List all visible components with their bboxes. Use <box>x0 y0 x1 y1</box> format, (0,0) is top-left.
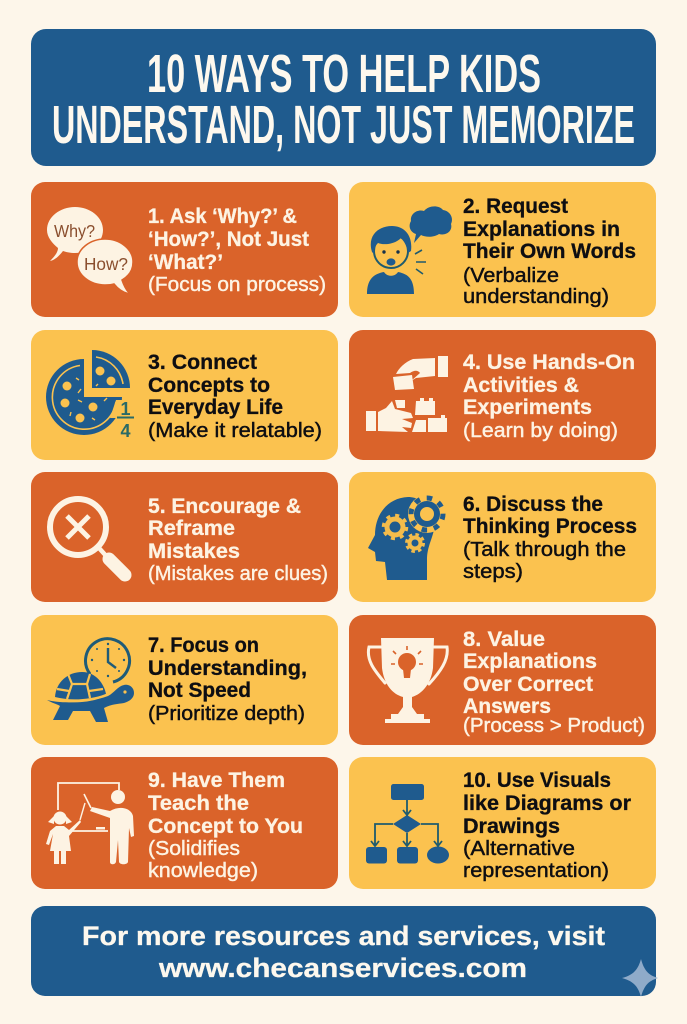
subtitle <box>463 837 609 882</box>
heading <box>148 768 303 838</box>
subtitle: representation) <box>463 859 609 882</box>
heading: 8. Value <box>463 627 545 651</box>
heading <box>463 627 597 718</box>
panel: tip 4 <box>349 330 656 460</box>
subtitle: (Make it relatable) <box>148 419 322 442</box>
subtitle: (Learn by doing) <box>463 419 618 442</box>
icon: child speaking <box>367 206 452 294</box>
heading: Reframe <box>148 516 235 540</box>
heading <box>148 350 283 419</box>
heading <box>148 494 301 563</box>
panel: tip 9 <box>31 757 338 889</box>
subtitle: steps) <box>463 560 523 583</box>
subtitle: (Talk through the <box>463 538 626 561</box>
heading: 2. Request <box>463 194 568 218</box>
footer text: For more resources and services, visit <box>82 921 605 951</box>
heading: 9. Have Them <box>148 768 285 792</box>
heading: Explanations in <box>463 217 620 241</box>
icon: pizza fraction: 4 <box>120 421 131 441</box>
panel: tip 10 <box>349 757 656 889</box>
icon: head with gears <box>368 495 446 580</box>
footer text: www.checanservices.com <box>158 953 527 983</box>
icon: turtle and clock <box>47 639 134 722</box>
heading: like Diagrams or <box>463 791 632 815</box>
subtitle: understanding) <box>463 285 609 308</box>
heading: Thinking Process <box>463 514 637 538</box>
panel: tip 8 <box>349 615 656 745</box>
title banner <box>31 29 656 166</box>
heading: Concept to You <box>148 814 303 838</box>
icon: speech bubbles: Why? <box>54 221 95 241</box>
subtitle <box>463 538 626 583</box>
heading: Everyday Life <box>148 395 283 419</box>
heading <box>463 492 637 538</box>
heading <box>148 204 309 274</box>
heading: 3. Connect <box>148 350 257 374</box>
subtitle: (Mistakes are clues) <box>148 562 328 585</box>
heading <box>463 194 636 263</box>
heading: Their Own Words <box>463 239 636 263</box>
heading: 7. Focus on <box>148 633 259 657</box>
panel: tip 5 <box>31 472 338 602</box>
subtitle: (Prioritize depth) <box>148 702 305 725</box>
subtitle: (Alternative <box>463 837 575 860</box>
title <box>52 44 635 155</box>
heading: 4. Use Hands-On <box>463 350 635 374</box>
icon: trophy with light bulb <box>368 638 447 723</box>
panel: tip 2 <box>349 182 656 317</box>
panel: tip 6 <box>349 472 656 602</box>
heading: Explanations <box>463 649 597 673</box>
heading: 10. Use Visuals <box>463 768 611 792</box>
panel: tip 3 <box>31 330 338 460</box>
heading <box>463 350 635 419</box>
subtitle: (Solidifies <box>148 837 240 860</box>
subtitle <box>463 264 609 308</box>
icon: flowchart <box>366 784 449 864</box>
heading: Drawings <box>463 814 560 838</box>
icon: hands and blocks <box>366 356 448 432</box>
heading: ‘What?’ <box>148 250 223 274</box>
heading: 5. Encourage & <box>148 494 301 518</box>
heading: Concepts to <box>148 373 270 397</box>
heading <box>148 633 307 702</box>
heading: Mistakes <box>148 539 240 563</box>
icon: magnifier with X <box>50 499 125 575</box>
footer text <box>82 921 605 983</box>
heading: Experiments <box>463 395 592 419</box>
heading: 1. Ask ‘Why?’ & <box>148 204 297 228</box>
heading: Activities & <box>463 373 579 397</box>
heading <box>463 768 632 838</box>
subtitle <box>148 837 258 882</box>
icon: speech bubbles: How? <box>84 254 128 274</box>
footer banner <box>31 906 656 996</box>
heading: Not Speed <box>148 678 251 702</box>
heading: ‘How?’, Not Just <box>148 227 309 251</box>
heading: Teach the <box>148 791 249 815</box>
panel: tip 7 <box>31 615 338 745</box>
subtitle: (Verbalize <box>463 264 559 287</box>
panel: tip 1 <box>31 182 338 317</box>
subtitle: (Process > Product) <box>463 714 645 737</box>
icon: sparkle <box>622 959 658 997</box>
heading: Over Correct <box>463 672 593 696</box>
heading: Understanding, <box>148 656 307 680</box>
icon: pizza fraction: 1 <box>120 399 131 419</box>
subtitle: knowledge) <box>148 859 258 882</box>
icon: child teaching at board <box>46 783 134 864</box>
heading: Answers <box>463 694 551 718</box>
icon: speech bubbles <box>47 207 133 294</box>
icon: pizza fraction <box>46 350 136 441</box>
heading: 6. Discuss the <box>463 492 603 516</box>
subtitle: (Focus on process) <box>148 273 326 296</box>
